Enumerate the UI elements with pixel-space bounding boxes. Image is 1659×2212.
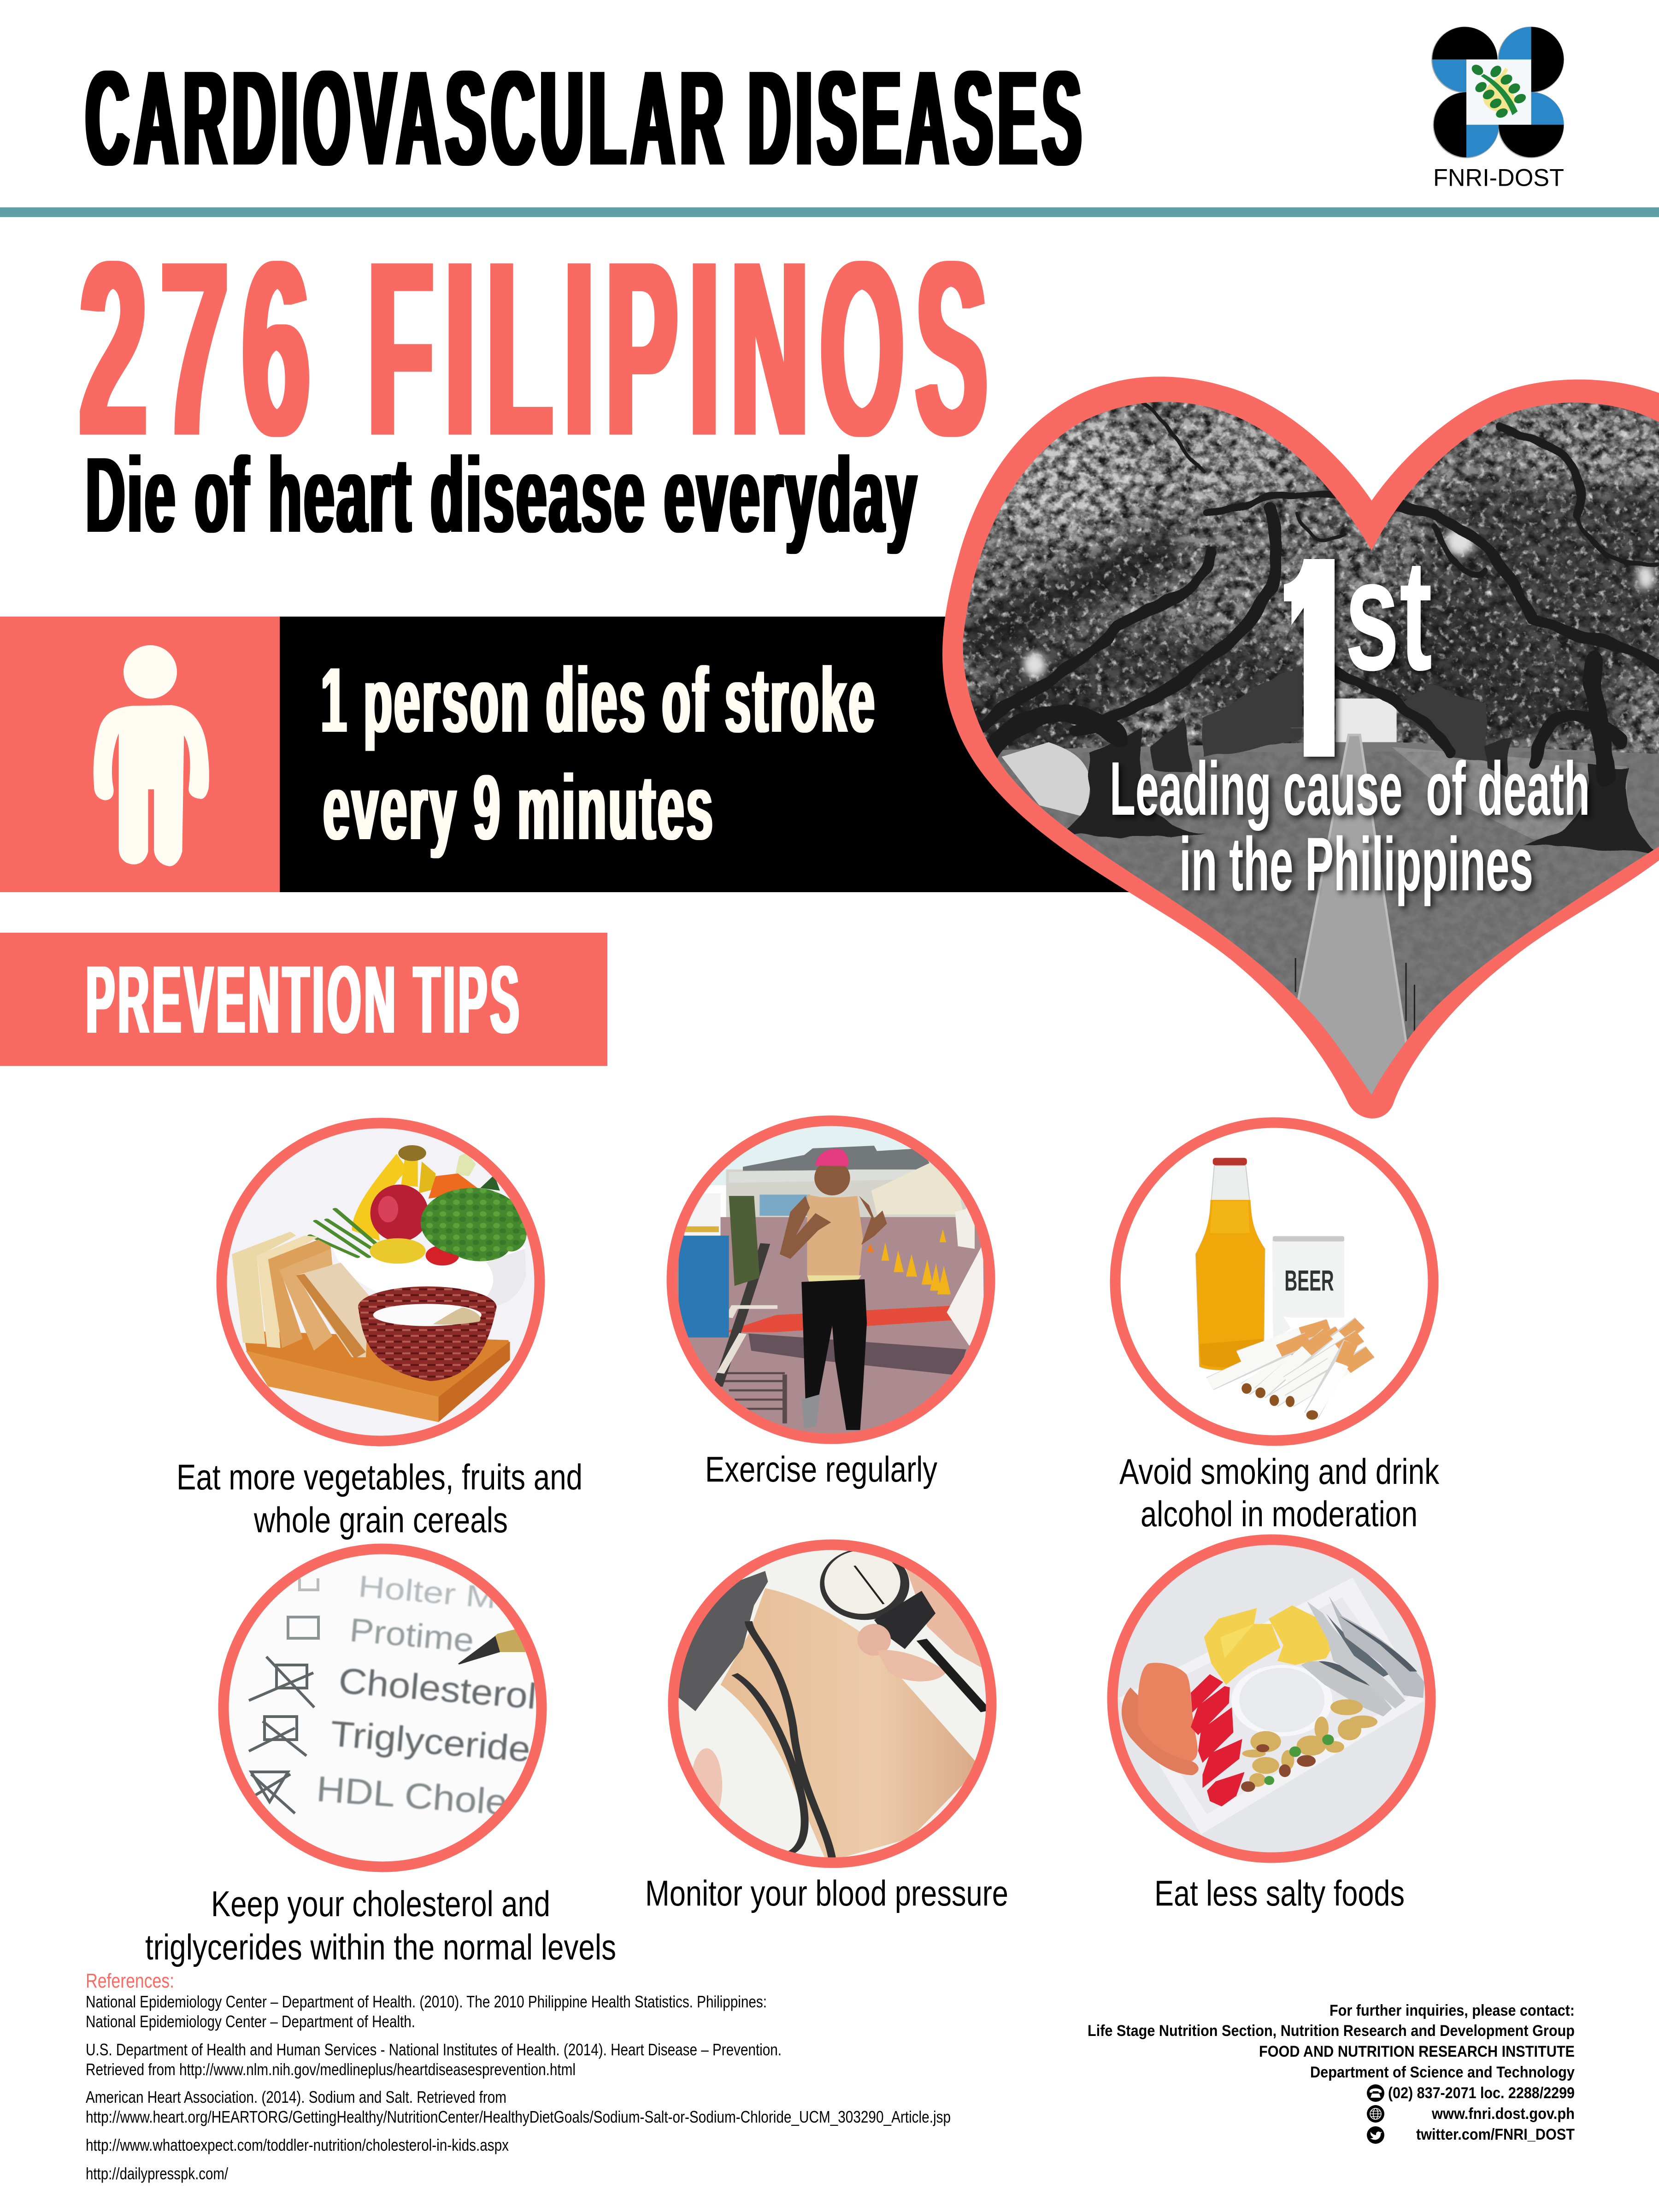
ordinal: 1st: st bbox=[1345, 526, 1432, 704]
icon: twitter bbox=[1367, 2126, 1384, 2144]
panel: prevention tips heading bbox=[0, 933, 607, 1066]
reference list: Retrieved from http://www.nlm.nih.gov/medlineplus/heartdiseasesprevention.html bbox=[86, 2060, 576, 2079]
reference list: National Epidemiology Center – Department of Health. bbox=[86, 2012, 415, 2031]
references bbox=[86, 1970, 951, 2183]
photo: runner circle bbox=[665, 1117, 1000, 1445]
caption: leading cause of death bbox=[1110, 746, 1590, 906]
panel: prevention tips heading: PREVENTION TIPS bbox=[86, 946, 522, 1053]
contact text: twitter.com/FNRI_DOST bbox=[1416, 2126, 1575, 2143]
caption: triglycerides within the normal levels bbox=[145, 1927, 616, 1967]
photo: checklist circle: HDL Chole bbox=[315, 1768, 509, 1823]
fence posts bbox=[1295, 958, 1414, 1033]
contact text: For further inquiries, please contact: bbox=[1330, 2002, 1575, 2019]
contact block bbox=[1088, 2002, 1575, 2144]
contact text bbox=[1088, 2002, 1575, 2143]
caption: whole grain cereals bbox=[253, 1500, 508, 1540]
trunks bbox=[1058, 728, 1206, 837]
icon: person bbox=[94, 645, 209, 866]
tip: keep cholesterol and triglycerides normal bbox=[145, 1544, 616, 1967]
contact text: FOOD AND NUTRITION RESEARCH INSTITUTE bbox=[1259, 2043, 1575, 2060]
tip: exercise regularly bbox=[665, 1117, 1000, 1489]
photo: checklist circle: Cholesterol bbox=[337, 1660, 538, 1717]
photo: salty foods circle bbox=[1104, 1534, 1439, 1867]
references heading: References: bbox=[86, 1970, 174, 1992]
heart outline bbox=[942, 377, 1659, 1118]
caption: Monitor your blood pressure bbox=[645, 1873, 1008, 1913]
contact text: www.fnri.dost.gov.ph bbox=[1431, 2105, 1575, 2123]
stroke statistic text: every 9 minutes bbox=[323, 756, 715, 859]
headline: 276 Filipinos bbox=[79, 210, 999, 488]
caption: alcohol in moderation bbox=[1141, 1494, 1418, 1534]
logo: FNRI-DOST bbox=[1431, 27, 1565, 191]
reference list bbox=[86, 1992, 951, 2183]
road bbox=[1298, 735, 1408, 1101]
photo: beer and cigarettes circle: BEER bbox=[1284, 1265, 1334, 1297]
distant tree rows bbox=[978, 403, 1659, 851]
logo: FNRI-DOST: FNRI-DOST bbox=[1433, 164, 1564, 191]
teal divider bar bbox=[0, 207, 1659, 217]
ground bbox=[992, 742, 1659, 1095]
title: CARDIOVASCULAR bbox=[86, 43, 729, 193]
tip: eat less salty foods bbox=[1104, 1534, 1439, 1913]
caption: Eat more vegetables, fruits and bbox=[176, 1457, 582, 1497]
reference list: American Heart Association. (2014). Sodium and Salt. Retrieved from bbox=[86, 2088, 506, 2106]
photo: checklist circle: Protime bbox=[348, 1612, 476, 1659]
photo: food circle bbox=[212, 1117, 559, 1450]
branches bbox=[978, 403, 1659, 776]
heart photo: tree avenue bbox=[963, 402, 1659, 1095]
contact text: Department of Science and Technology bbox=[1310, 2064, 1575, 2081]
reference list: http://dailypresspk.com/ bbox=[86, 2164, 228, 2183]
caption bbox=[145, 1883, 616, 1967]
stroke statistic text bbox=[321, 649, 877, 859]
icon: phone bbox=[1367, 2084, 1384, 2102]
photo: checklist circle bbox=[217, 1544, 548, 1876]
reference list: U.S. Department of Health and Human Services - National Institutes of Health. (2014). Heart Disease – Prevention. bbox=[86, 2040, 782, 2059]
reference list: http://www.whattoexpect.com/toddler-nutrition/cholesterol-in-kids.aspx bbox=[86, 2136, 509, 2154]
photo: checklist circle: Triglyceride bbox=[329, 1713, 532, 1770]
caption: Keep your cholesterol and bbox=[211, 1883, 550, 1924]
photo: checklist circle: Holter M bbox=[357, 1569, 498, 1615]
tip: monitor blood pressure bbox=[645, 1536, 1008, 1913]
photo: beer and cigarettes circle bbox=[1115, 1123, 1433, 1441]
photo: blood pressure circle bbox=[665, 1536, 1000, 1870]
stroke statistic text: 1 person dies of stroke bbox=[321, 649, 877, 752]
infographic poster: DISEASES bbox=[748, 43, 1087, 193]
caption: Exercise regularly bbox=[705, 1449, 937, 1489]
caption: Eat less salty foods bbox=[1154, 1873, 1405, 1913]
reference list: National Epidemiology Center – Department of Health. (2010). The 2010 Philippine Health Statistics. Philippines: bbox=[86, 1992, 767, 2011]
panel: heart with leading cause bbox=[922, 369, 1659, 1145]
reference list: http://www.heart.org/HEARTORG/GettingHealthy/NutritionCenter/HealthyDietGoals/Sodium-Salt-or-Sodium-Chloride_UCM_303290_Article.jsp bbox=[86, 2107, 951, 2126]
caption bbox=[1119, 1451, 1440, 1534]
headline: 276 Filipinos: 276 bbox=[79, 210, 324, 488]
caption: Avoid smoking and drink bbox=[1119, 1451, 1440, 1492]
contact text: (02) 837-2071 loc. 2288/2299 bbox=[1388, 2084, 1575, 2102]
contact text: Life Stage Nutrition Section, Nutrition Research and Development Group bbox=[1088, 2022, 1575, 2040]
caption bbox=[176, 1457, 582, 1540]
tip: avoid smoking and moderate alcohol bbox=[1115, 1123, 1440, 1534]
icon: globe bbox=[1367, 2105, 1384, 2123]
panel: stroke statistic band bbox=[0, 617, 1155, 892]
tip: vegetables, fruits and grains bbox=[176, 1117, 582, 1540]
ordinal: 1st: 1 bbox=[1283, 503, 1352, 817]
title bbox=[86, 43, 1087, 193]
